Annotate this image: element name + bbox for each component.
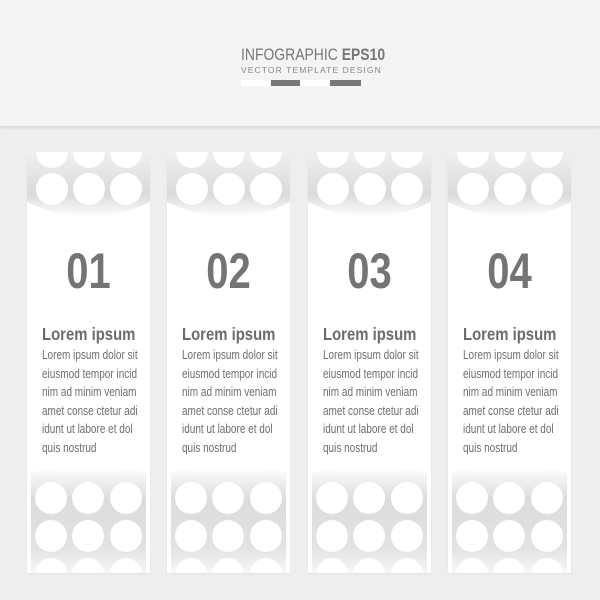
body text: quis nostrud bbox=[42, 441, 96, 455]
body text: idunt ut labore et dol bbox=[182, 422, 273, 436]
body text: amet conse ctetur adi bbox=[323, 404, 419, 418]
panel: 02 bbox=[167, 152, 290, 573]
circles bbox=[308, 152, 431, 573]
body text: Lorem ipsum dolor sit bbox=[323, 348, 419, 362]
body text: nim ad minim veniam bbox=[463, 385, 557, 399]
body text: eiusmod tempor incid bbox=[463, 367, 558, 381]
body text: Lorem ipsum dolor sit bbox=[182, 348, 278, 362]
body text: Lorem ipsum dolor sit bbox=[42, 348, 138, 362]
body text: quis nostrud bbox=[182, 441, 236, 455]
body text: quis nostrud bbox=[463, 441, 517, 455]
title: INFOGRAPHIC EPS10 bbox=[241, 45, 385, 64]
body text: eiusmod tempor incid bbox=[42, 367, 137, 381]
heading: Lorem ipsum bbox=[182, 324, 275, 344]
body text: nim ad minim veniam bbox=[42, 385, 136, 399]
body text: Lorem ipsum dolor sit bbox=[463, 348, 559, 362]
header band bbox=[0, 0, 600, 126]
circles bbox=[167, 152, 290, 573]
body text: quis nostrud bbox=[323, 441, 377, 455]
panel: 01 bbox=[27, 152, 150, 573]
heading: Lorem ipsum bbox=[42, 324, 135, 344]
body text: idunt ut labore et dol bbox=[42, 422, 133, 436]
panel: 04 bbox=[448, 152, 571, 573]
heading: Lorem ipsum bbox=[463, 324, 556, 344]
body text bbox=[42, 348, 138, 455]
body text: amet conse ctetur adi bbox=[42, 404, 138, 418]
body text: nim ad minim veniam bbox=[323, 385, 417, 399]
body text bbox=[323, 348, 419, 455]
subtitle: VECTOR TEMPLATE DESIGN bbox=[241, 65, 382, 75]
panel: 03 bbox=[308, 152, 431, 573]
body text bbox=[463, 348, 559, 455]
decorative bars bbox=[241, 80, 361, 86]
circles bbox=[27, 152, 150, 573]
number: 04 bbox=[487, 243, 532, 299]
heading: Lorem ipsum bbox=[323, 324, 416, 344]
body text: eiusmod tempor incid bbox=[182, 367, 277, 381]
body text: nim ad minim veniam bbox=[182, 385, 276, 399]
body text: amet conse ctetur adi bbox=[182, 404, 278, 418]
number: 01 bbox=[66, 243, 111, 299]
body text: amet conse ctetur adi bbox=[463, 404, 559, 418]
circles bbox=[448, 152, 571, 573]
number: 03 bbox=[347, 243, 392, 299]
body text bbox=[182, 348, 278, 455]
body text: idunt ut labore et dol bbox=[323, 422, 414, 436]
number: 02 bbox=[206, 243, 251, 299]
body text: eiusmod tempor incid bbox=[323, 367, 418, 381]
body text: idunt ut labore et dol bbox=[463, 422, 554, 436]
